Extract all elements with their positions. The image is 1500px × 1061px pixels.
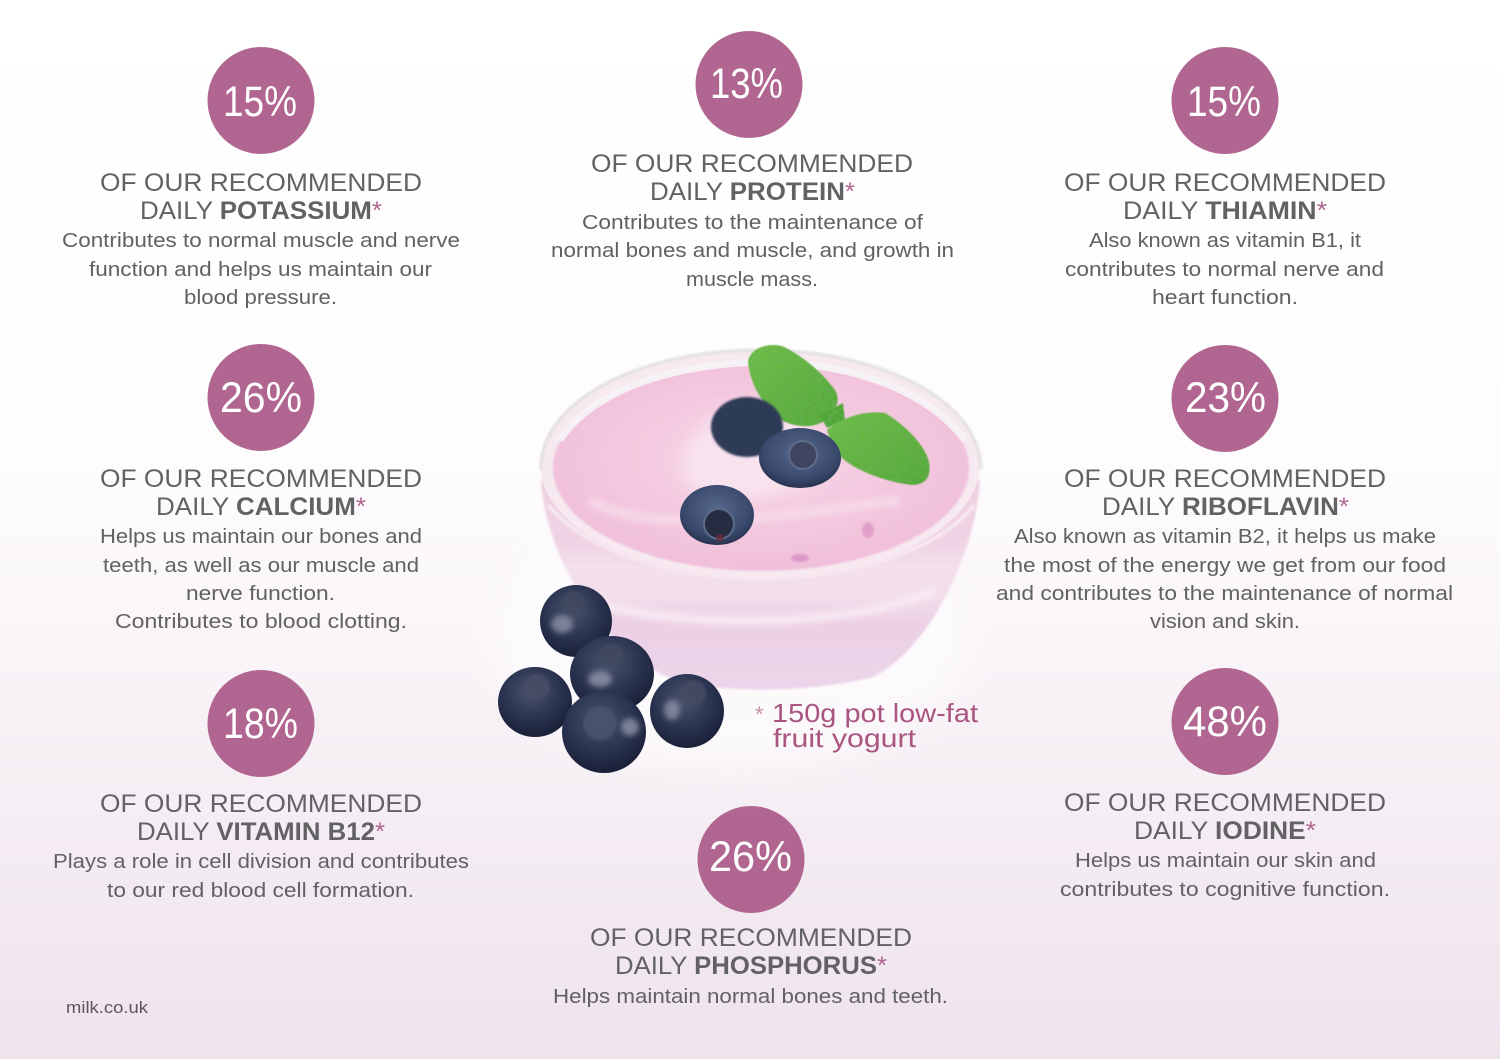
description: potassium: blood pressure. [184,287,337,309]
heading: iodine: DAILY IODINE* [1134,817,1316,845]
heading: riboflavin: DAILY RIBOFLAVIN* [1102,493,1349,521]
description: potassium: function and helps us maintain our [89,259,432,281]
description: calcium: Helps us maintain our bones and [100,526,422,548]
badge: 18%: 18% [223,700,298,748]
panel: protein [551,31,954,291]
description: protein [551,212,954,291]
description: vitamin B12 [53,851,469,902]
description: calcium: nerve function. [186,583,335,605]
badge: 26%: 26% [709,833,792,881]
badge: 18% [208,670,314,777]
description: calcium [100,526,422,633]
panel: iodine [1060,668,1390,901]
badge: 15%: 15% [223,78,297,126]
mint leaves [748,345,930,485]
caption: serving size: 150g pot low-fat [772,698,979,728]
heading: phosphorus: DAILY PHOSPHORUS* [615,952,887,980]
description: riboflavin: vision and skin. [1150,611,1300,633]
badge: 15% [208,47,314,154]
heading: potassium: DAILY POTASSIUM* [140,197,382,225]
panel: thiamin [1064,47,1386,309]
heading: vitamin B12: OF OUR RECOMMENDED [100,790,422,818]
yogurt surface [540,350,981,621]
description: iodine: Helps us maintain our skin and [1075,850,1376,872]
heading: thiamin: DAILY THIAMIN * [1123,197,1327,225]
badge: 48% [1172,668,1278,775]
heading: protein: OF OUR RECOMMENDED [591,150,913,178]
panel: riboflavin [996,345,1453,633]
description: vitamin B12: to our red blood cell formation. [107,880,414,902]
heading: thiamin [1064,169,1386,225]
heading: vitamin B12: DAILY VITAMIN B12* [137,818,385,846]
heading: riboflavin [1064,465,1386,521]
badge: 26% [698,806,804,913]
description: riboflavin: Also known as vitamin B2, it helps us make [1014,526,1436,548]
heading: protein: DAILY PROTEIN* [650,178,855,206]
badge: 26% [208,344,314,451]
description: thiamin [1065,230,1384,309]
heading: vitamin B12 [100,790,422,846]
heading: potassium [100,169,422,225]
description: riboflavin: and contributes to the maintenance of normal [996,583,1453,605]
caption: serving size: fruit yogurt [773,723,917,753]
heading: calcium: DAILY CALCIUM* [156,493,366,521]
description: riboflavin: the most of the energy we get from our food [1004,555,1446,577]
description: thiamin: Also known as vitamin B1, it [1089,230,1361,252]
heading: protein [591,150,913,206]
heading: iodine [1064,789,1386,845]
caption: serving size [755,698,979,753]
badge: 23%: 23% [1185,374,1266,422]
panel: potassium [62,47,460,309]
blueberries on yogurt [680,397,841,545]
panel: calcium [100,344,422,633]
description: iodine [1060,850,1390,901]
source: website: milk.co.uk [66,998,149,1017]
description: phosphorus: Helps maintain normal bones and teeth. [553,986,948,1008]
panel: vitamin B12 [53,670,469,902]
heading: riboflavin: OF OUR RECOMMENDED [1064,465,1386,493]
bowl body [541,480,980,690]
heading: thiamin: OF OUR RECOMMENDED [1064,169,1386,197]
heading: phosphorus: OF OUR RECOMMENDED [590,924,912,952]
badge: 15%: 15% [1187,78,1261,126]
badge: 13%: 13% [710,60,783,108]
description: riboflavin [996,526,1453,633]
description: calcium: teeth, as well as our muscle and [103,555,419,577]
description: protein: muscle mass. [686,269,818,291]
badge: 23% [1172,345,1278,452]
badge: 13% [696,31,802,138]
panel: phosphorus [553,806,948,1008]
heading: potassium: OF OUR RECOMMENDED [100,169,422,197]
heading: phosphorus [590,924,912,980]
heading: calcium: OF OUR RECOMMENDED [100,465,422,493]
heading: iodine: OF OUR RECOMMENDED [1064,789,1386,817]
description: potassium [62,230,460,309]
heading: calcium [100,465,422,521]
badge: 26%: 26% [220,374,302,422]
loose blueberries [498,585,724,773]
description: potassium: Contributes to normal muscle and nerve [62,230,460,252]
badge: 15% [1172,47,1278,154]
illustration: bowl of yogurt with blueberries and mint [495,345,981,773]
description: vitamin B12: Plays a role in cell division and contributes [53,851,469,873]
description: thiamin: heart function. [1152,287,1298,309]
description: iodine: contributes to cognitive function. [1060,879,1390,901]
caption: serving size: * [755,702,764,727]
badge: 48%: 48% [1183,698,1267,746]
description: thiamin: contributes to normal nerve and [1065,259,1384,281]
description: protein: Contributes to the maintenance of [582,212,924,234]
description: protein: normal bones and muscle, and growth in [551,240,954,262]
description: calcium: Contributes to blood clotting. [115,611,407,633]
